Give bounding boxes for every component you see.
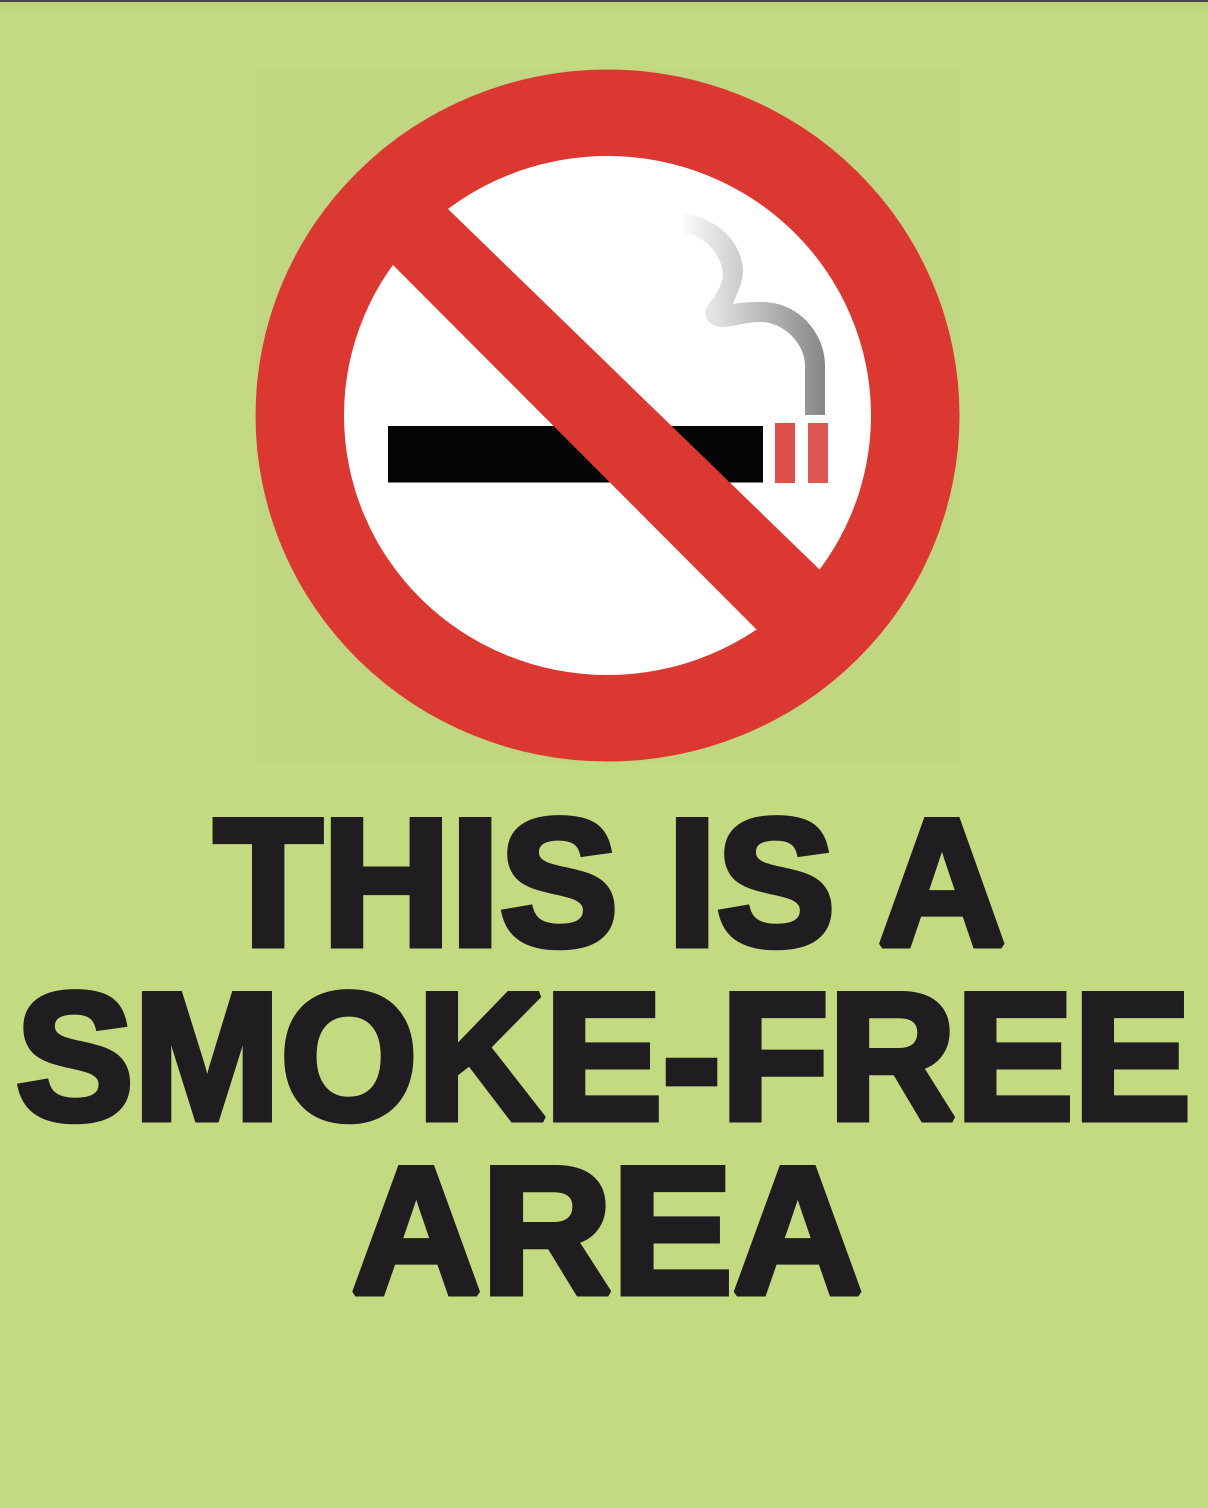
icon background square: [256, 70, 961, 762]
icon: no smoking sign: [256, 70, 960, 762]
sign outer red ring: [256, 70, 960, 762]
title line 1: THIS IS A: [214, 782, 1006, 984]
title line 2: SMOKE-FREE: [16, 956, 1191, 1158]
icon: cigarette: [388, 423, 828, 483]
prohibition diagonal bar: [393, 209, 820, 630]
title: [16, 782, 1191, 1332]
title line 3: AREA: [351, 1130, 863, 1332]
icon: smoke: [683, 214, 825, 415]
sign white interior: [344, 156, 871, 675]
